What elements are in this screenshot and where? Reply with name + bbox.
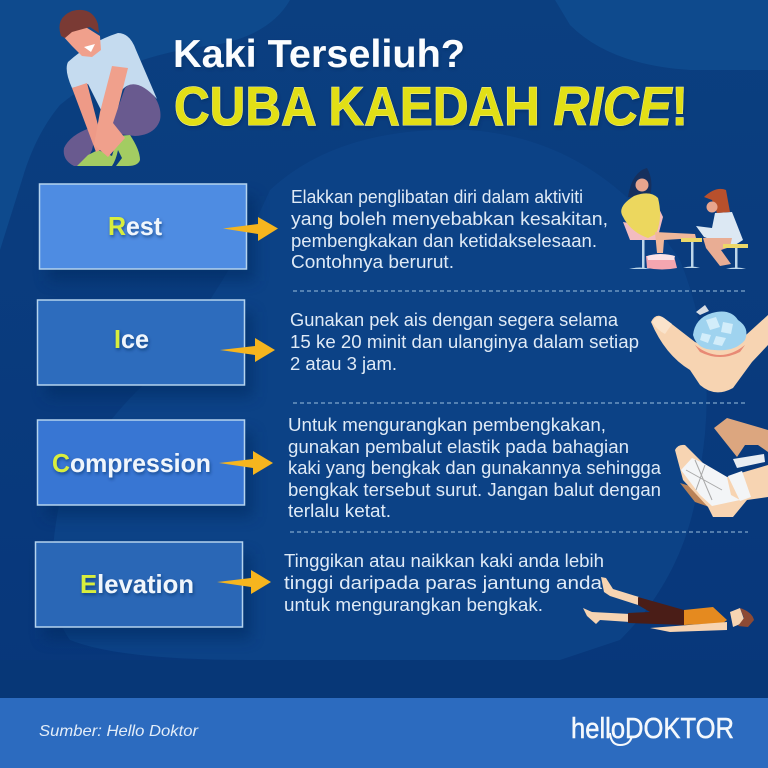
text: Rest description	[291, 186, 608, 272]
arrow	[217, 570, 271, 594]
text: Rest description: pembengkakan dan ketidakselesaan.	[291, 230, 597, 251]
text: Compression description: gunakan pembalut elastik pada bahagian	[288, 436, 629, 457]
icon: person lying with legs raised	[583, 577, 754, 632]
arrow	[220, 338, 275, 362]
icon: foot with ice pack	[651, 305, 768, 392]
text: Rest description: yang boleh menyebabkan kesakitan,	[291, 208, 608, 229]
panel: Elevation	[36, 542, 271, 639]
label: Compression: Compression	[52, 448, 211, 478]
panel: Compression	[38, 420, 273, 517]
label: Rest: Rest	[108, 211, 162, 241]
text: Elevation description: untuk mengurangkan bengkak.	[284, 594, 543, 615]
text: Ice description: 2 atau 3 jam.	[290, 353, 397, 374]
text: Elevation description: tinggi daripada paras jantung anda	[284, 572, 603, 593]
text: Compression description: bengkak tersebut surut. Jangan balut dengan	[288, 479, 661, 500]
text: Ice description	[290, 309, 639, 374]
text: Elevation description	[284, 550, 604, 615]
label: Ice: Ice	[114, 324, 149, 354]
divider	[293, 290, 748, 292]
text: Rest description: Elakkan penglibatan diri dalam aktiviti	[291, 186, 583, 207]
text: Ice description: 15 ke 20 minit dan ulanginya dalam setiap	[290, 331, 639, 352]
icon: man holding sprained ankle	[59, 10, 160, 166]
text: Compression description: terlalu ketat.	[288, 500, 391, 521]
icon: hands bandaging ankle	[675, 418, 768, 517]
panel: Rest	[40, 184, 278, 281]
text: Compression description	[288, 414, 662, 521]
divider	[290, 531, 748, 533]
arrow	[223, 217, 278, 241]
text: Compression description: Untuk mengurangkan pembengkakan,	[288, 414, 606, 435]
source credit: Sumber: Hello Doktor	[39, 723, 199, 740]
title	[173, 33, 688, 137]
panel: Ice	[38, 300, 275, 397]
title line 2: CUBA KAEDAH RICE!	[174, 75, 688, 137]
logo: helloDOKTOR: helloDOKTOR	[571, 713, 734, 745]
label: Elevation: Elevation	[80, 569, 194, 599]
icon: foot massage scene	[621, 168, 748, 270]
text: Rest description: Contohnya berurut.	[291, 251, 454, 272]
title line 1: Kaki Terseliuh?	[173, 33, 465, 76]
footer bar	[0, 698, 768, 768]
arrow	[219, 451, 273, 475]
divider	[293, 402, 748, 404]
text: Elevation description: Tinggikan atau naikkan kaki anda lebih	[284, 550, 604, 571]
text: Ice description: Gunakan pek ais dengan segera selama	[290, 309, 619, 330]
text: Compression description: kaki yang bengkak dan gunakannya sehingga	[288, 457, 662, 478]
